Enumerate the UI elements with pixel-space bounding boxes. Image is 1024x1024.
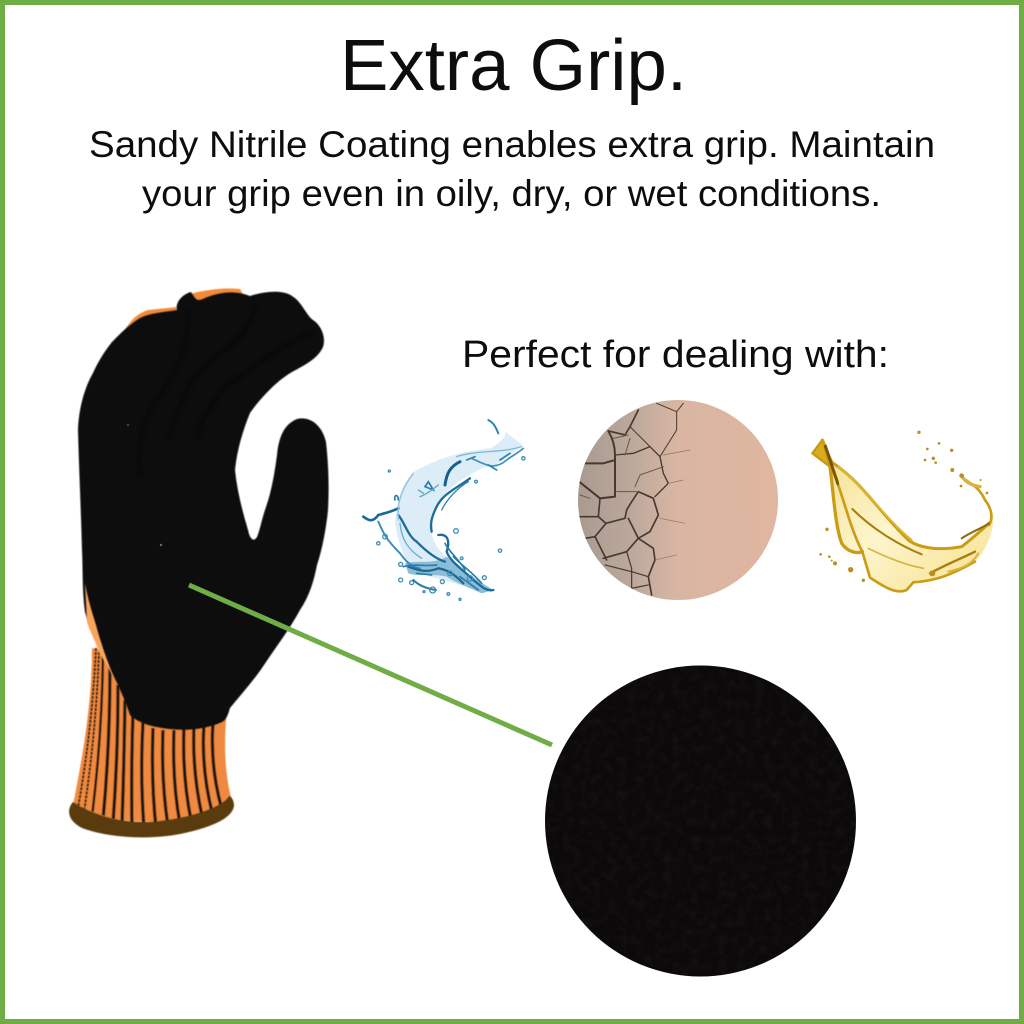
title: Extra Grip. [340,26,687,106]
glove rolled brown hem [69,796,234,837]
skin cracks [580,403,690,595]
glove finger shading [139,305,310,475]
water bottom mottled mass [405,557,493,593]
glove illustration [69,288,329,837]
glove black nitrile palm [78,292,329,730]
green pointer line [189,585,552,745]
description text [89,124,935,214]
subheading: Perfect for dealing with: [462,334,889,376]
description text: Sandy Nitrile Coating enables extra grip. Maintain [89,124,935,165]
sandy nitrile close-up circle [545,666,856,976]
dry cracked skin circle [578,400,778,600]
glove speckles [127,424,162,546]
glove orange back of fingers [124,288,243,334]
description text: your grip even in oily, dry, or wet conditions. [142,173,881,214]
icon: oil splash [812,431,993,591]
icon: water splash [363,420,525,600]
glove orange side strip [85,583,114,678]
glove knit cuff [73,648,233,828]
